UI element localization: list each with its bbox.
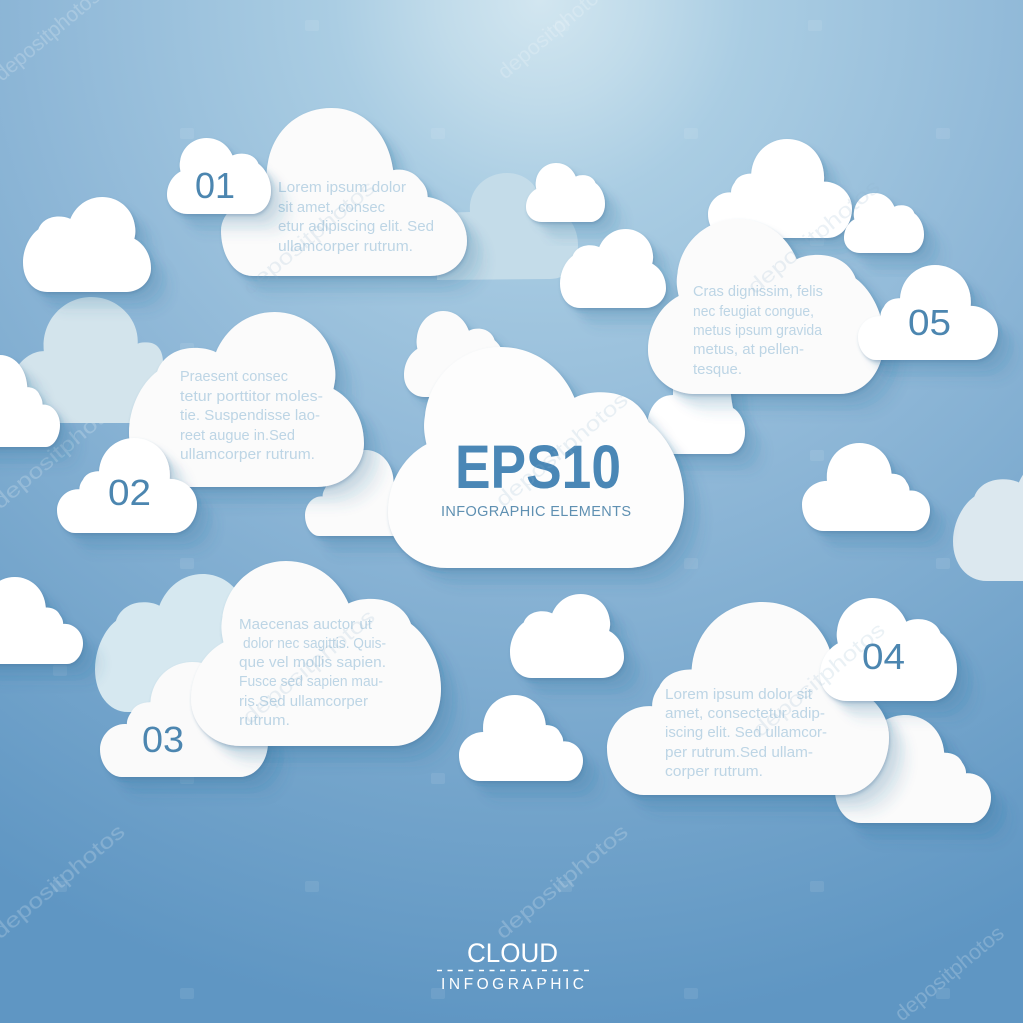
text 02 bbox=[180, 368, 323, 463]
cloud 04 body bbox=[607, 602, 889, 795]
text 02: tie. Suspendisse lao- bbox=[180, 407, 320, 424]
text 02: Praesent consec bbox=[180, 368, 288, 385]
pale cloud: right edge bbox=[953, 453, 1023, 581]
dashed line bbox=[437, 970, 589, 972]
text 03 bbox=[239, 616, 386, 729]
text 05 bbox=[693, 283, 823, 378]
pale cloud: left bbox=[14, 297, 163, 423]
small cloud: upper left bbox=[23, 197, 151, 292]
text 02: tetur porttitor moles- bbox=[180, 388, 323, 405]
text 04: amet, consectetur adip- bbox=[665, 705, 825, 722]
text 04: per rutrum.Sed ullam- bbox=[665, 744, 813, 761]
watermarks over clouds: depositphotos bbox=[743, 175, 885, 299]
text 05: tesque. bbox=[693, 361, 742, 378]
text 05: nec feugiat congue, bbox=[693, 303, 814, 320]
small cloud: bottom centre bbox=[459, 695, 583, 781]
watermarks over clouds bbox=[238, 175, 890, 742]
number 03: 03 bbox=[142, 719, 184, 760]
small cloud: top far right bbox=[844, 193, 924, 253]
small cloud: behind main right bbox=[647, 370, 745, 454]
subtitle: INFOGRAPHIC ELEMENTS bbox=[441, 504, 631, 520]
CLOUD: CLOUD bbox=[467, 938, 558, 968]
number cloud 05 bbox=[858, 265, 998, 360]
small cloud: behind main left bbox=[305, 450, 415, 536]
text 05: metus, at pellen- bbox=[693, 341, 804, 358]
cloud 02 body bbox=[129, 312, 364, 487]
number cloud 03 bbox=[100, 662, 268, 777]
number cloud 01 bbox=[167, 138, 271, 214]
pale cloud: top centre bbox=[437, 173, 578, 280]
watermarks over clouds: depositphotos bbox=[238, 176, 380, 300]
panel: 05 bbox=[648, 219, 998, 394]
panel: 01 bbox=[167, 108, 467, 276]
text 04: corper rutrum. bbox=[665, 763, 763, 780]
watermarks over clouds: depositphotos bbox=[238, 605, 380, 729]
text 03: Fusce sed sapien mau- bbox=[239, 673, 383, 690]
cloud 01 body bbox=[221, 108, 467, 276]
cloud 03 body bbox=[191, 561, 441, 746]
number 05: 05 bbox=[908, 302, 951, 343]
small cloud: left edge bbox=[0, 355, 60, 447]
panel: 03 bbox=[100, 561, 441, 777]
pale cloud: lower left bbox=[95, 574, 269, 712]
small cloud: top right bbox=[708, 139, 852, 238]
number 04: 04 bbox=[862, 636, 905, 677]
text 01: ullamcorper rutrum. bbox=[278, 238, 413, 255]
small cloud: top centre bbox=[526, 163, 605, 222]
text 02: reet augue in.Sed bbox=[180, 427, 295, 444]
text 04 bbox=[665, 686, 827, 780]
number 02: 02 bbox=[108, 472, 151, 513]
text 04: Lorem ipsum dolor sit bbox=[665, 686, 813, 703]
number cloud 04 bbox=[820, 598, 957, 701]
panel: 02 bbox=[57, 312, 364, 533]
text 01 bbox=[278, 179, 434, 255]
text 03: rutrum. bbox=[239, 712, 290, 729]
text 01: sit amet, consec bbox=[278, 199, 385, 216]
small cloud: bottom right bbox=[835, 715, 991, 823]
watermarks: depositphotos bbox=[491, 820, 633, 944]
INFOGRAPHIC: INFOGRAPHIC bbox=[441, 976, 584, 993]
small cloud: lower left edge bbox=[0, 577, 83, 664]
panel: 04 bbox=[607, 598, 957, 795]
text 03: ris.Sed ullamcorper bbox=[239, 693, 368, 710]
cloud 05 body bbox=[648, 219, 884, 394]
small cloud: right bbox=[802, 443, 930, 531]
number cloud 02 bbox=[57, 438, 197, 533]
text 05: Cras dignissim, felis bbox=[693, 283, 823, 300]
watermarks: depositphotos bbox=[890, 921, 1009, 1023]
watermarks over clouds: depositphotos bbox=[491, 388, 633, 512]
watermarks over clouds: depositphotos bbox=[748, 618, 890, 742]
footer title bbox=[437, 938, 589, 993]
small cloud: right of top centre bbox=[560, 229, 666, 308]
text 03: que vel mollis sapien. bbox=[239, 654, 386, 671]
small cloud: lower centre bbox=[510, 594, 624, 678]
number 01: 01 bbox=[195, 165, 235, 206]
text 01: etur adipiscing elit. Sed bbox=[278, 218, 434, 235]
title EPS10: EPS10 bbox=[455, 433, 621, 501]
text 03: dolor nec sagittis. Quis- bbox=[243, 635, 386, 652]
text 04: iscing elit. Sed ullamcor- bbox=[665, 724, 827, 741]
main cloud body bbox=[388, 347, 684, 568]
text 02: ullamcorper rutrum. bbox=[180, 446, 315, 463]
small cloud: centre top bbox=[404, 311, 507, 397]
text 01: Lorem ipsum dolor bbox=[278, 179, 406, 196]
panel: main cloud bbox=[388, 347, 684, 568]
text 05: metus ipsum gravida bbox=[693, 322, 823, 339]
text 03: Maecenas auctor ut bbox=[239, 616, 373, 633]
